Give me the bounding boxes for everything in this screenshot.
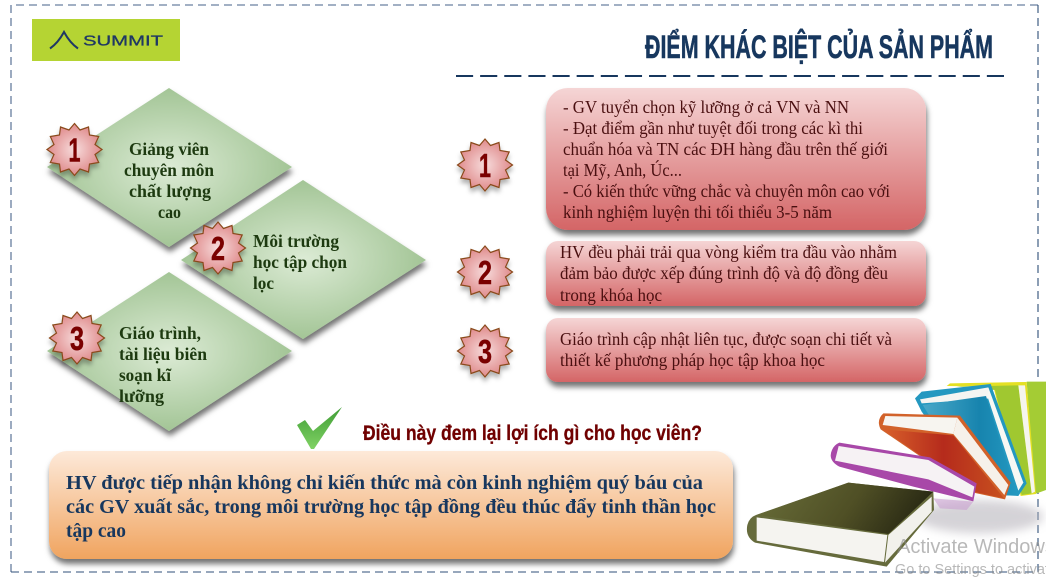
book: lime xyxy=(947,382,1046,496)
panel: detail 1 xyxy=(546,88,926,230)
badge 2 right: 2 xyxy=(478,254,492,291)
detail 2 text: trong khóa học xyxy=(560,285,662,305)
diamond 3 text: Giáo trình, xyxy=(119,323,201,343)
panel: detail 3 xyxy=(546,318,926,382)
diamond 1 text: chất lượng xyxy=(129,181,211,201)
detail 1 text: - Có kiến thức vững chắc và chuyên môn cao với xyxy=(563,181,890,201)
diamond 2 text: Môi trường xyxy=(253,231,339,251)
benefit text: các GV xuất sắc, trong môi trường học tập đồng đều thúc đẩy tinh thần học xyxy=(66,496,716,518)
diamond 1 text: Giảng viên xyxy=(129,139,209,159)
detail 1 text: - GV tuyển chọn kỹ lưỡng ở cả VN và NN xyxy=(563,97,849,117)
detail 2 text: đảm bảo được xếp đúng trình độ và độ đồng đều xyxy=(560,263,888,283)
panel: benefit xyxy=(49,451,733,559)
diamond 3 text: soạn kĩ xyxy=(119,365,172,385)
book: blue xyxy=(915,384,1027,496)
floor shadow xyxy=(917,500,1043,533)
diamond 2: environment xyxy=(181,180,426,339)
badge 3 right xyxy=(458,325,512,377)
diamond 2 text: lọc xyxy=(253,273,274,293)
diamond 1 text: chuyên môn xyxy=(124,160,214,180)
badge 3 right: 3 xyxy=(478,333,492,370)
logo: SUMMIT xyxy=(83,34,163,50)
badge 2 left: 2 xyxy=(211,230,225,267)
book: orange xyxy=(879,413,1011,499)
question heading: Điều này đem lại lợi ích gì cho học viên? xyxy=(363,422,702,445)
diamond 2 text: học tập chọn xyxy=(253,252,347,272)
diamond 3 text: tài liệu biên xyxy=(119,344,207,364)
benefit text: HV được tiếp nhận không chỉ kiến thức mà còn kinh nghiệm quý báu của xyxy=(66,472,703,494)
detail 3 text: Giáo trình cập nhật liên tục, được soạn chi tiết và xyxy=(560,329,892,349)
badge 2 left xyxy=(190,222,246,274)
diamond 1: lecturers xyxy=(47,88,292,247)
detail 1 text: chuẩn hóa và TN các ĐH hàng đầu trên thế giới xyxy=(563,139,888,159)
detail 1 text: tại Mỹ, Anh, Úc... xyxy=(563,160,682,180)
logo xyxy=(32,19,180,61)
book: dark green xyxy=(747,483,934,567)
badge 1 right xyxy=(458,139,512,191)
book: purple xyxy=(831,443,977,501)
detail 1 text: - Đạt điểm gần như tuyệt đối trong các kì thi xyxy=(563,118,863,138)
badge 1 left: 1 xyxy=(68,132,80,168)
icon: summit peak xyxy=(50,32,78,48)
benefit text: tập cao xyxy=(66,520,126,542)
badge 3 left xyxy=(50,312,104,364)
badge 3 left: 3 xyxy=(70,320,84,357)
badge 1 left xyxy=(47,124,102,176)
watermark xyxy=(895,536,1046,578)
diamond 3 text: lưỡng xyxy=(119,386,164,406)
detail 3 text: thiết kế phương pháp học tập khoa học xyxy=(560,350,825,370)
detail 2 text: HV đều phải trải qua vòng kiểm tra đầu vào nhằm xyxy=(560,242,897,262)
icon: check mark xyxy=(297,407,342,449)
badge 1 right: 1 xyxy=(479,147,491,184)
diamond 3: materials xyxy=(47,272,292,431)
detail 1 text: kinh nghiệm luyện thi tối thiểu 3-5 năm xyxy=(563,202,832,222)
diamond 1 text: cao xyxy=(158,202,181,222)
icon: books xyxy=(747,382,1046,567)
badge 2 right xyxy=(458,246,512,298)
panel: detail 2 xyxy=(546,241,926,306)
